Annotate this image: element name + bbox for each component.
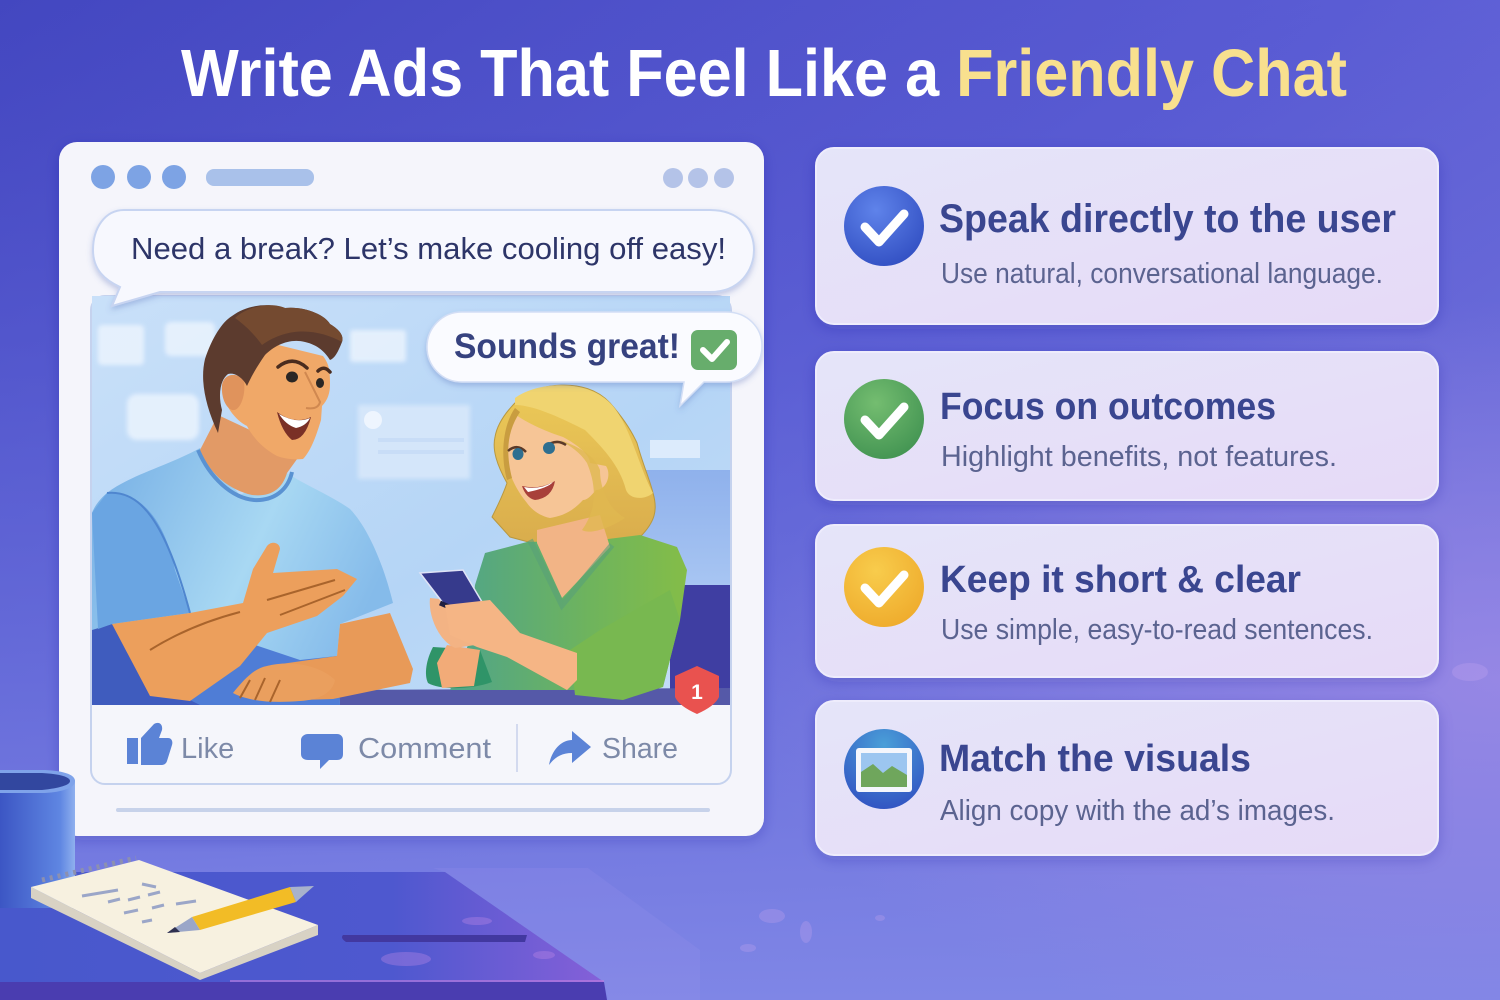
panel: focus on outcomes	[816, 352, 1438, 500]
cuff and lower hand	[426, 647, 492, 688]
far arm	[233, 613, 413, 700]
action: like: Like	[181, 733, 234, 765]
action: comment: Comment	[358, 733, 491, 765]
icon: phone	[418, 569, 482, 604]
panel: speak directly: Speak directly to the user	[939, 197, 1396, 241]
desk	[0, 868, 700, 1000]
shirt	[92, 448, 393, 705]
icon: image	[844, 729, 924, 809]
notification badge: 1	[691, 681, 703, 704]
action: comment	[301, 733, 491, 769]
panel: match the visuals: Match the visuals	[939, 738, 1251, 780]
panel: match the visuals	[816, 701, 1438, 855]
raised arm and hand	[112, 543, 357, 701]
table edge	[320, 688, 730, 705]
bubble: need a break: Need a break? Let’s make cooling off easy!	[131, 231, 726, 266]
panel: focus on outcomes: Highlight benefits, not features.	[941, 441, 1337, 473]
face details	[278, 361, 330, 372]
panel: focus on outcomes: Focus on outcomes	[940, 386, 1276, 428]
icon: blue check	[844, 186, 924, 266]
panel: speak directly: Use natural, conversational language.	[941, 258, 1383, 290]
notepad and pencil	[31, 858, 318, 980]
head	[222, 343, 330, 459]
illustration: two people chatting	[92, 296, 730, 705]
action: like	[127, 723, 234, 765]
bubble: sounds great: Sounds great!	[454, 327, 680, 366]
window controls	[91, 165, 734, 189]
face	[506, 413, 608, 518]
panel: match the visuals: Align copy with the ad’s images.	[940, 795, 1335, 827]
neck	[537, 515, 610, 598]
sweater	[450, 535, 687, 690]
action: share	[549, 731, 678, 765]
post frame	[91, 296, 731, 784]
panel: keep it short: Keep it short & clear	[940, 559, 1301, 601]
panel: social ad window	[59, 142, 764, 836]
decorative sparkles	[740, 663, 1488, 952]
hair back	[492, 385, 655, 547]
icon: pencil	[167, 886, 314, 933]
hair	[203, 305, 342, 433]
hair front	[515, 385, 653, 498]
icon: yellow check	[844, 547, 924, 627]
ear	[222, 375, 244, 410]
bubble: need a break	[93, 210, 754, 306]
icon: green check	[691, 330, 737, 370]
woman	[420, 385, 687, 700]
forearm and hand	[445, 600, 577, 690]
sleeve	[570, 590, 680, 700]
notification badge	[675, 666, 719, 714]
panel: keep it short: Use simple, easy-to-read sentences.	[941, 614, 1373, 646]
neck	[200, 415, 300, 495]
icon: green check	[844, 379, 924, 459]
panel: speak directly	[816, 148, 1438, 324]
icon: mug	[0, 770, 75, 908]
man	[92, 305, 413, 705]
action: share: Share	[602, 733, 678, 765]
panel: keep it short	[816, 525, 1438, 677]
bubble: sounds great	[427, 312, 762, 406]
eyes and mouth	[508, 442, 566, 452]
title: Write Ads That Feel Like a Friendly Chat	[181, 36, 1347, 111]
